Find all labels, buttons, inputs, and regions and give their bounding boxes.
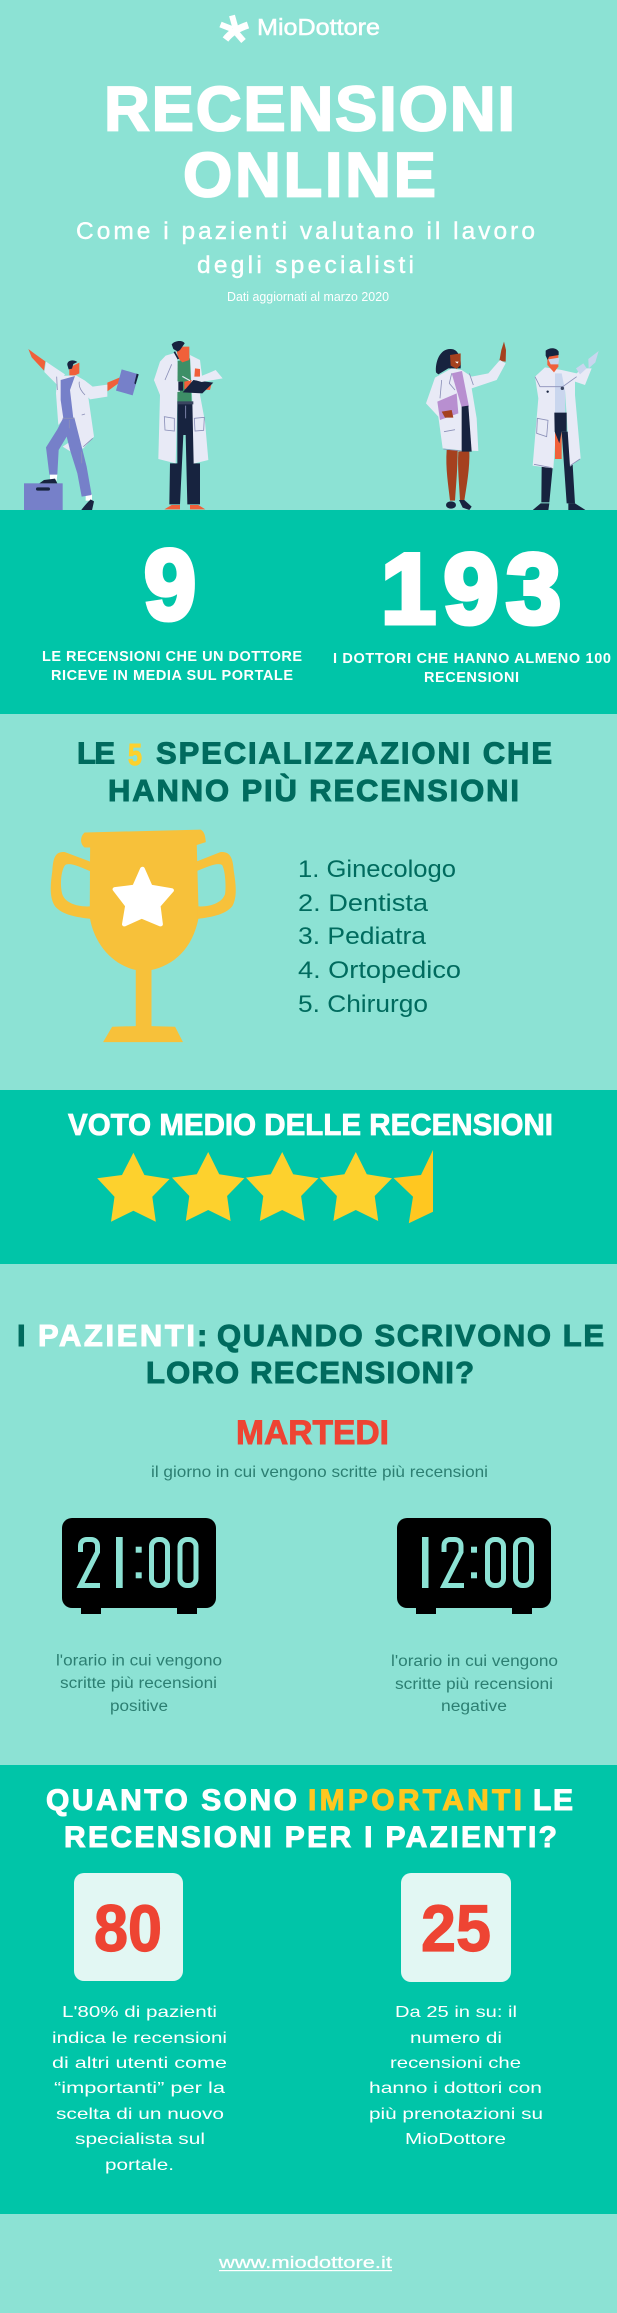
text: 25 reviews explanation: hanno i dottori con (369, 2080, 542, 2097)
caption: negative reviews time: negative (441, 1698, 507, 1715)
heading: when patients write (17, 1318, 604, 1390)
stat: 9 reviews (42, 529, 302, 684)
heading: top 5 specializations: LE (77, 736, 115, 770)
list: specializations: 3. Pediatra (298, 923, 427, 950)
stat card: 25 (401, 1873, 511, 1982)
title: RECENSIONI (104, 74, 515, 144)
heading: importance of reviews: LE (533, 1784, 573, 1817)
icon: logo mark (220, 16, 248, 41)
subtitle: Come i pazienti valutano il lavoro (76, 218, 535, 245)
text: 25 reviews explanation (369, 2004, 543, 2148)
title: ONLINE (183, 140, 436, 210)
text: 80 percent explanation: indica le recensioni (52, 2030, 227, 2047)
caption: negative reviews time (391, 1653, 558, 1715)
stat: 193 doctors: I DOTTORI CHE HANNO ALMENO 100 (333, 651, 611, 667)
gloves (576, 351, 599, 374)
logo: MioDottore (220, 14, 380, 41)
stat: 9 reviews: RICEVE IN MEDIA SUL PORTALE (51, 668, 293, 684)
list: specializations: 5. Chirurgo (298, 991, 428, 1018)
icon: trophy (51, 830, 236, 1042)
icon: digital clock 21:00 (62, 1518, 216, 1614)
date note: Dati aggiornati al marzo 2020 (227, 289, 389, 304)
stat: 193 doctors: RECENSIONI (424, 670, 519, 686)
stat: 9 reviews: 9 (144, 529, 196, 640)
title (104, 74, 515, 210)
stat card: 80: 80 (94, 1891, 162, 1965)
text: 25 reviews explanation: recensioni che (390, 2055, 521, 2072)
heading: top 5 specializations: HANNO PIÙ RECENSIONI (108, 772, 519, 808)
heading: importance of reviews: RECENSIONI PER I PAZIENTI? (64, 1821, 557, 1854)
text: 80 percent explanation: “importanti” per la (54, 2080, 225, 2097)
text: 25 reviews explanation: numero di (410, 2030, 502, 2047)
text: 25 reviews explanation: più prenotazioni su (369, 2106, 543, 2123)
illustration: doctor on the phone with clipboard (154, 341, 223, 509)
heading: when patients write: I (17, 1318, 26, 1353)
text: 80 percent explanation (52, 2004, 227, 2174)
illustration: female doctor raising her hand (426, 342, 506, 510)
panel: average rating (0, 1090, 617, 1264)
heading: importance of reviews (46, 1784, 573, 1854)
logo wordmark: MioDottore (257, 14, 380, 40)
text: 80 percent explanation: L'80% di pazienti (62, 2004, 217, 2021)
heading: importance of reviews: QUANTO SONO (46, 1784, 297, 1817)
clipboard (116, 369, 139, 395)
caption: positive reviews time: scritte più recensioni (60, 1675, 217, 1692)
stat: 9 reviews: LE RECENSIONI CHE UN DOTTORE (42, 649, 302, 665)
caption: negative reviews time: scritte più recensioni (395, 1676, 553, 1693)
heading: when patients write: LORO RECENSIONI? (146, 1355, 474, 1390)
heading: top 5 specializations: 5 (128, 737, 142, 772)
caption: busiest day: il giorno in cui vengono scritte più recensioni (151, 1464, 488, 1481)
subtitle (76, 218, 535, 279)
heading: top 5 specializations: SPECIALIZZAZIONI CHE (156, 736, 552, 770)
panel: key numbers (0, 510, 617, 714)
footer link: www.miodottore.it (218, 2253, 392, 2272)
heading: top 5 specializations (77, 736, 552, 808)
stat card: 80 (74, 1873, 183, 1981)
heading: when patients write: QUANDO SCRIVONO LE (217, 1318, 604, 1353)
heading: when patients write: PAZIENTI (38, 1318, 195, 1353)
clipboard and paper (183, 370, 223, 393)
list: specializations: 4. Ortopedico (298, 957, 461, 984)
clipboard (437, 393, 458, 420)
stat: 193 doctors (333, 533, 611, 686)
list: specializations (298, 856, 461, 1018)
box (24, 483, 63, 510)
text: 25 reviews explanation: Da 25 in su: il (395, 2004, 517, 2021)
caption: negative reviews time: l'orario in cui vengono (391, 1653, 558, 1670)
day: Martedi: MARTEDI (236, 1414, 389, 1452)
text: 80 percent explanation: di altri utenti come (52, 2055, 227, 2072)
list: specializations: 1. Ginecologo (298, 856, 456, 883)
caption: positive reviews time: positive (110, 1698, 168, 1715)
list: specializations: 2. Dentista (298, 890, 429, 917)
text: 80 percent explanation: scelta di un nuovo (56, 2106, 224, 2123)
caption: positive reviews time: l'orario in cui vengono (56, 1652, 222, 1670)
text: 80 percent explanation: specialista sul (75, 2131, 205, 2148)
text: 25 reviews explanation: MioDottore (405, 2131, 506, 2148)
illustration: male doctor with mask and gloves (532, 348, 599, 510)
illustration: doctor stepping on a box (24, 349, 139, 510)
heading: average rating: VOTO MEDIO DELLE RECENSIONI (68, 1107, 553, 1142)
panel: importance of reviews (0, 1765, 617, 2214)
stat: 193 doctors: 193 (381, 533, 561, 644)
rating stars (97, 1150, 433, 1223)
caption: positive reviews time (56, 1652, 222, 1715)
heading: importance of reviews: IMPORTANTI (308, 1784, 522, 1817)
text: 80 percent explanation: portale. (105, 2157, 174, 2174)
heading: when patients write: : (197, 1318, 207, 1353)
icon: digital clock 12:00 (397, 1518, 551, 1614)
subtitle: degli specialisti (197, 252, 414, 279)
stat card: 25: 25 (421, 1891, 491, 1965)
